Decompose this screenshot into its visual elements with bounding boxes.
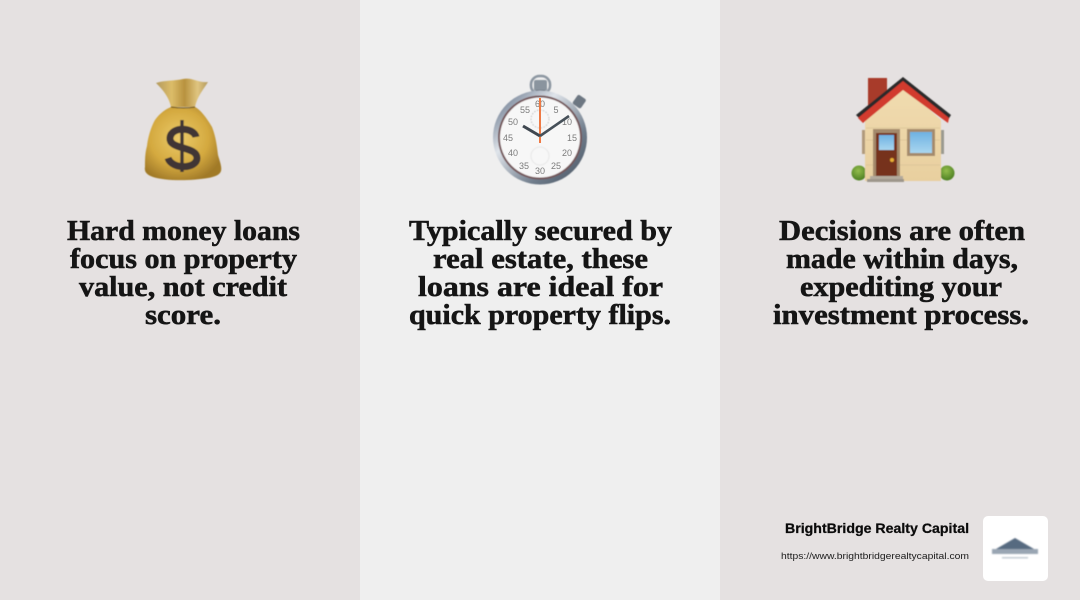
icon: stopwatch: 60 bbox=[535, 99, 545, 109]
icon: stopwatch: 30 bbox=[535, 166, 545, 176]
heading: right column text: expediting your bbox=[800, 271, 1002, 303]
heading: middle column text: loans are ideal for bbox=[418, 271, 663, 303]
text: company name: BrightBridge Realty Capital bbox=[785, 521, 969, 536]
heading: left column text: value, not credit bbox=[79, 271, 287, 303]
heading: left column text: Hard money loans bbox=[67, 215, 300, 247]
heading: left column text bbox=[67, 215, 300, 331]
icon: stopwatch: 25 bbox=[551, 161, 561, 171]
heading: middle column text: real estate, these bbox=[433, 243, 648, 275]
panel: middle column background bbox=[360, 0, 720, 600]
panel: right column background bbox=[720, 0, 1080, 600]
icon: stopwatch bbox=[493, 76, 587, 184]
icon: stopwatch: 10 bbox=[562, 117, 572, 127]
icon: stopwatch: 20 bbox=[562, 148, 572, 158]
heading: right column text: made within days, bbox=[786, 243, 1018, 275]
heading: left column text: focus on property bbox=[70, 243, 298, 275]
heading: middle column text: Typically secured by bbox=[409, 215, 673, 247]
heading: right column text: investment process. bbox=[773, 299, 1029, 331]
heading: right column text bbox=[773, 215, 1029, 331]
icon: company logo bbox=[983, 516, 1048, 581]
heading: middle column text bbox=[409, 215, 673, 331]
icon: money bag bbox=[145, 79, 221, 180]
icon: stopwatch: 50 bbox=[508, 117, 518, 127]
text: website url: https://www.brightbridgerealtycapital.com bbox=[781, 551, 969, 562]
heading: left column text: score. bbox=[145, 299, 221, 331]
icon: stopwatch: 5 bbox=[553, 105, 559, 115]
icon: stopwatch: 15 bbox=[567, 133, 577, 143]
icon: stopwatch: 45 bbox=[503, 133, 513, 143]
heading: middle column text: quick property flips. bbox=[409, 299, 671, 331]
icon: stopwatch: 55 bbox=[520, 105, 530, 115]
icon: house bbox=[852, 77, 954, 182]
heading: right column text: Decisions are often bbox=[779, 215, 1025, 247]
icon: stopwatch: 40 bbox=[508, 148, 518, 158]
icon: stopwatch: 35 bbox=[519, 161, 529, 171]
panel: left column background bbox=[0, 0, 360, 600]
